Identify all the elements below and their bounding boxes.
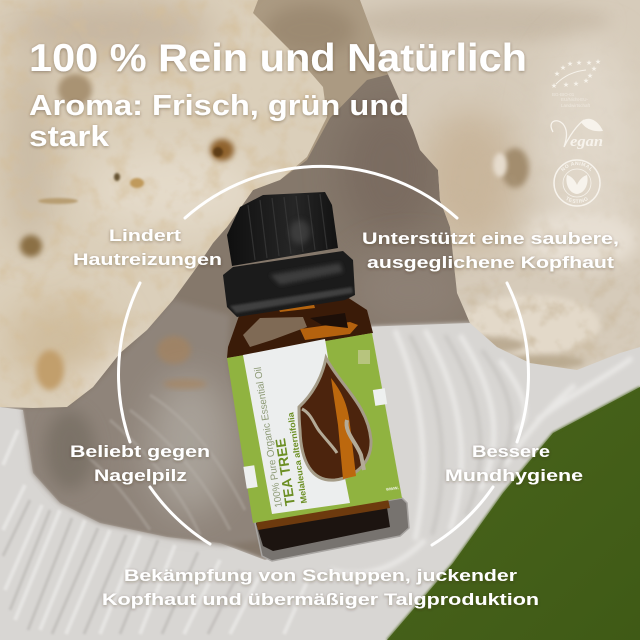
badge: EU organic: ★ [563, 81, 569, 89]
badge: EU organic: ★ [554, 70, 560, 78]
subtitle: Aroma: Frisch, grün und [29, 90, 409, 122]
label: Bessere Mundhygiene [445, 443, 583, 485]
lower left cast shadow [23, 300, 262, 545]
circle arcs [119, 166, 528, 545]
green surface [387, 387, 640, 640]
badge: EU organic: BG-BIO-01 [552, 92, 575, 97]
label: Bekämpfung von Schuppen: Kopfhaut und übermäßiger Talgproduktion [102, 591, 539, 609]
subtitle [29, 90, 409, 153]
middle brown rock [240, 0, 390, 180]
badge: EU organic: Landwirtschaft [561, 103, 591, 108]
label [227, 333, 402, 523]
badge: EU organic: ★ [586, 59, 592, 67]
subtitle: stark [29, 121, 110, 153]
upper left rock [0, 0, 340, 420]
badge: no animal testing: TESTING [566, 196, 588, 203]
oil drop [299, 358, 371, 480]
badge: EU organic: ★ [567, 60, 573, 68]
label: Bessere Mundhygiene: Bessere [472, 443, 550, 461]
title: 100 % Rein und Natürlich [29, 37, 527, 80]
label: www. [385, 485, 400, 493]
bottom glass [255, 498, 409, 561]
label: Unterstützt eine saubere, ausgeglichene Kopfhaut: ausgeglichene Kopfhaut [367, 254, 615, 272]
label: Bekämpfung von Schuppen: Bekämpfung von Schuppen, juckender [124, 567, 518, 585]
label: Unterstützt eine saubere, ausgeglichene Kopfhaut [362, 230, 619, 272]
collar [223, 251, 355, 317]
badge: EU organic: ★ [576, 59, 582, 67]
ribbed cap [227, 192, 338, 266]
label: Bessere Mundhygiene: Mundhygiene [445, 467, 583, 485]
label: Beliebt gegen Nagelpilz [70, 443, 210, 485]
badge: EU organic: ★ [587, 72, 593, 80]
label: Lindert Hautreizungen: Lindert [109, 227, 182, 245]
label: Melaleuca alternifolia [285, 411, 309, 504]
label: Lindert Hautreizungen: Hautreizungen [73, 251, 222, 269]
upper shadow gradient [340, 100, 440, 240]
essential oil bottle [223, 192, 409, 561]
label: TEA TREE [272, 437, 298, 507]
label: Lindert Hautreizungen [73, 227, 222, 269]
badge: Vegan: egan [570, 134, 603, 150]
badge: EU organic: ★ [591, 65, 597, 73]
upper right rock [340, 0, 640, 380]
badge: EU organic: ★ [595, 58, 601, 66]
label: Beliebt gegen Nagelpilz: Beliebt gegen [70, 443, 210, 461]
label: Unterstützt eine saubere, ausgeglichene Kopfhaut: Unterstützt eine saubere, [362, 230, 619, 248]
badge: EU organic: EU/Nicht-EU- [561, 97, 589, 102]
badge: EU organic: ★ [573, 80, 579, 88]
badge: EU organic [551, 58, 601, 108]
label: Bekämpfung von Schuppen [102, 567, 539, 609]
badge: no animal testing: NO ANIMAL [561, 162, 592, 172]
badge: EU organic: ★ [551, 82, 557, 90]
label: Beliebt gegen Nagelpilz: Nagelpilz [94, 467, 187, 485]
badge: no animal testing [553, 159, 601, 207]
badge: EU organic: ★ [583, 77, 589, 85]
shoulder glass [227, 297, 373, 358]
badge: Vegan [551, 119, 603, 150]
right fabric stripes [330, 330, 632, 574]
fabric [0, 323, 640, 640]
lower left fabric stripes [3, 430, 310, 634]
badge: EU organic: ★ [560, 64, 566, 72]
label text: 100% Pure Organic Essential Oil [253, 366, 285, 508]
